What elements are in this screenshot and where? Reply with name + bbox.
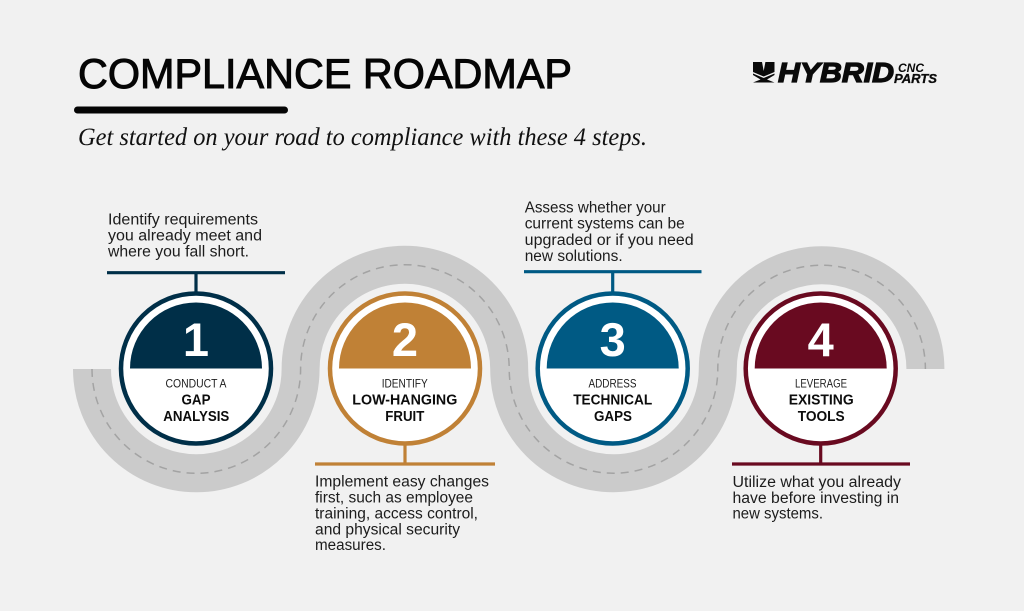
step 1 connector xyxy=(107,273,285,293)
logo wordmark: HYBRID xyxy=(778,57,894,88)
step 1 label: CONDUCT A xyxy=(166,379,227,391)
step 3 circle xyxy=(538,294,688,444)
step 4 number: 4 xyxy=(808,313,834,366)
step 3 xyxy=(524,200,702,444)
step 2 description: first, such as employee xyxy=(315,490,473,506)
step 1 description xyxy=(107,212,262,260)
step 4 description: have before investing in xyxy=(732,490,899,507)
subtitle: Get started on your road to compliance with these 4 steps. xyxy=(78,124,647,151)
step 1 label: GAP xyxy=(182,393,211,409)
step 1 description: Identify requirements xyxy=(108,212,258,228)
step 2 number: 2 xyxy=(392,313,418,366)
step 1 circle xyxy=(121,294,271,444)
step 3 description: new solutions. xyxy=(525,248,623,265)
step 4 label: LEVERAGE xyxy=(795,379,847,391)
step 1 label: ANALYSIS xyxy=(163,409,230,425)
step 2 circle xyxy=(330,294,480,444)
step 4 label xyxy=(789,379,854,425)
step 4 xyxy=(732,294,910,522)
step 2 label: FRUIT xyxy=(385,409,424,425)
step 1 label xyxy=(163,379,230,425)
step 2 label xyxy=(352,379,457,425)
step 2 label: LOW-HANGING xyxy=(352,393,457,409)
step 3 label xyxy=(573,379,652,425)
title: COMPLIANCE ROADMAP xyxy=(78,50,572,97)
step 4 circle xyxy=(746,294,896,444)
step 4 label: TOOLS xyxy=(798,409,845,425)
step 4 description: new systems. xyxy=(732,506,823,522)
logo PARTS: PARTS xyxy=(894,72,938,86)
step 3 label: TECHNICAL xyxy=(573,393,652,409)
step 2 connector xyxy=(315,444,495,464)
icon: logo mark xyxy=(753,62,774,82)
step 2 description xyxy=(315,474,489,554)
step 2 description: Implement easy changes xyxy=(315,474,489,491)
step 1 number panel xyxy=(130,302,262,368)
step 1 description: you already meet and xyxy=(108,228,262,244)
step 1 number: 1 xyxy=(183,313,209,366)
step 2 description: training, access control, xyxy=(315,506,478,522)
step 2 number panel xyxy=(339,302,471,368)
step 4 number panel xyxy=(755,302,887,368)
step 3 label: GAPS xyxy=(594,409,632,425)
step 4 description xyxy=(732,474,901,522)
title underline xyxy=(74,106,288,114)
step 4 label: EXISTING xyxy=(789,393,854,409)
step 3 description: Assess whether your xyxy=(525,200,666,217)
step 3 description: current systems can be xyxy=(525,216,685,233)
step 4 connector xyxy=(732,444,910,464)
winding road xyxy=(92,265,925,473)
step 1 description: where you fall short. xyxy=(107,244,249,260)
step 2 description: measures. xyxy=(315,537,386,554)
logo: Hybrid CNC Parts xyxy=(753,57,938,88)
step 2 xyxy=(315,294,495,554)
step 3 number: 3 xyxy=(600,313,626,366)
step 3 connector xyxy=(524,272,702,293)
step 3 number panel xyxy=(547,302,679,368)
step 3 description xyxy=(525,200,694,265)
step 2 label: IDENTIFY xyxy=(382,379,428,391)
logo CNC: CNC xyxy=(898,61,924,75)
step 2 description: and physical security xyxy=(315,522,460,538)
step 3 label: ADDRESS xyxy=(588,379,637,391)
step 1 xyxy=(107,212,285,444)
step 4 description: Utilize what you already xyxy=(732,474,901,491)
step 3 description: upgraded or if you need xyxy=(525,232,694,249)
